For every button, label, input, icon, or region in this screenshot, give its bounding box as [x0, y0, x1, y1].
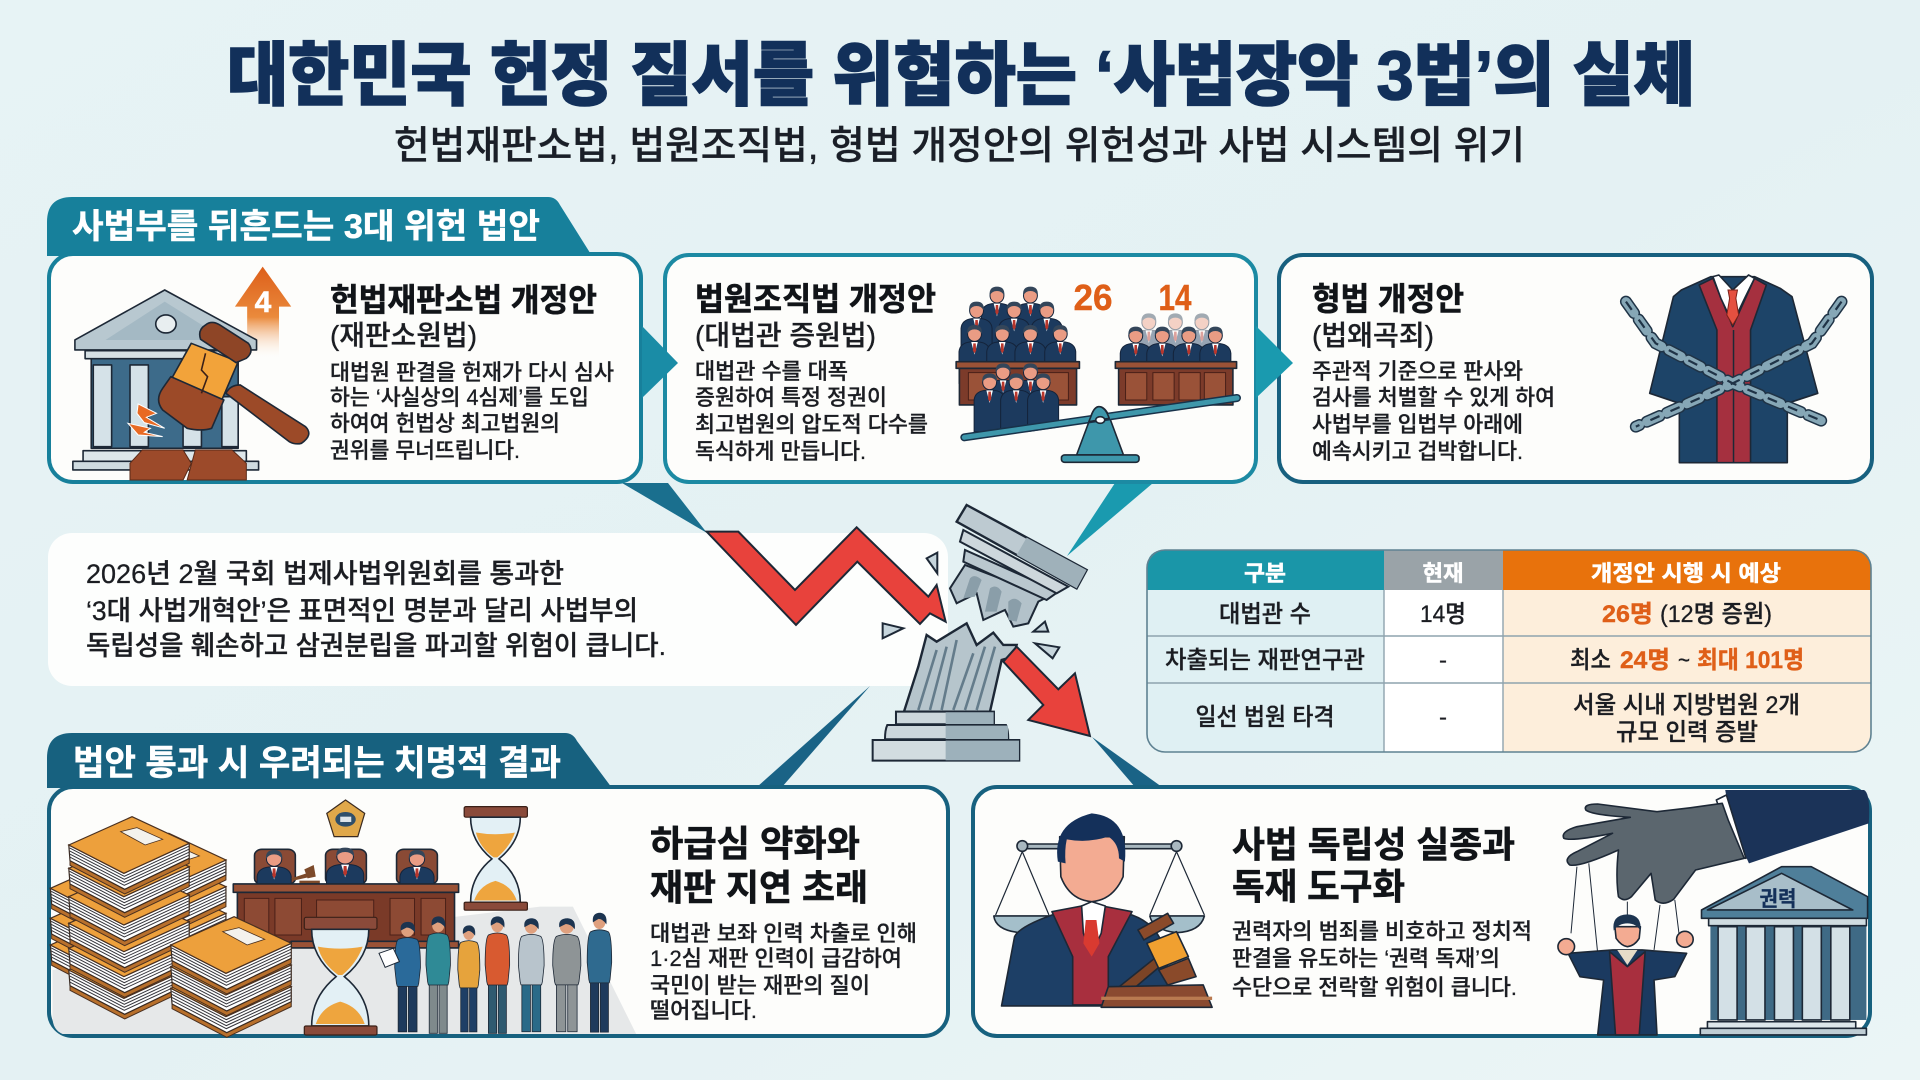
row: justices: (12명 증원): [1660, 601, 1772, 628]
heading: [650, 823, 868, 908]
description: [330, 360, 614, 463]
illustration: faceless judge with scales: [994, 813, 1212, 1007]
description: 사법부를 입법부 아래에: [1312, 412, 1523, 437]
arrow number: 4: [255, 286, 272, 319]
description: 권위를 무너뜨립니다.: [330, 438, 520, 463]
row: research judges: ~: [1678, 647, 1690, 674]
intro text box: 독립성을 훼손하고 삼권분립을 파괴할 위험이 큽니다.: [86, 631, 666, 661]
description: [1312, 359, 1555, 464]
connector spike: column to bottom left panel: [757, 686, 870, 787]
table header: [1244, 561, 1781, 586]
heading: 재판 지연 초래: [650, 867, 868, 908]
description: 최고법원의 압도적 다수를: [695, 412, 928, 437]
description: [1232, 919, 1532, 1000]
heading: 헌법재판소법 개정안: [330, 282, 597, 318]
description: 독식하게 만듭니다.: [695, 439, 866, 464]
row: research judges: [1165, 647, 1804, 674]
description: 1·2심 재판 인력이 급감하여: [650, 946, 902, 971]
subheading: (재판소원법): [330, 320, 477, 351]
description: 권력자의 범죄를 비호하고 정치적: [1232, 919, 1532, 944]
description: 국민이 받는 재판의 질이: [650, 973, 870, 998]
icon: cracked court and gavel: [73, 267, 309, 480]
heading: 하급심 약화와: [650, 823, 860, 864]
description: [650, 921, 917, 1023]
row: research judges: 최대 101명: [1697, 647, 1804, 674]
illustration: breaking column and falling arrows: [707, 505, 1090, 761]
description: 대법관 수를 대폭: [695, 359, 848, 384]
panel: lower court weakening: [49, 787, 948, 1037]
description: 하는 ‘사실상의 4심제’를 도입: [330, 385, 589, 410]
connector spike: panel 2 to column: [1067, 483, 1153, 556]
row: research judges: -: [1439, 647, 1447, 674]
comparison table: [1147, 550, 1871, 752]
row: justices: 26명: [1602, 601, 1653, 628]
row: lower courts: [1196, 692, 1800, 746]
description: 수단으로 전락할 위험이 큽니다.: [1232, 975, 1517, 1000]
row: lower courts: -: [1439, 704, 1447, 731]
section tab: three bills: 사법부를 뒤흔드는 3대 위헌 법안: [72, 208, 540, 246]
heading: 법원조직법 개정안: [695, 281, 936, 317]
description: 주관적 기준으로 판사와: [1312, 359, 1523, 384]
description: 증원하여 특정 정권이: [695, 385, 887, 410]
description: 떨어집니다.: [650, 998, 757, 1023]
intro text box: [48, 533, 948, 686]
illustration: case files, bench and waiting people: [50, 800, 636, 1037]
title: 대한민국 헌정 질서를 위협하는 ‘사법장악 3법’의 실체: [227, 37, 1695, 114]
panel: criminal act: [1279, 255, 1872, 482]
row: research judges: 24명: [1620, 647, 1670, 674]
illustration: justices on tilted scale: [956, 287, 1237, 462]
heading: 사법 독립성 실종과: [1232, 824, 1515, 865]
row: lower courts: 규모 인력 증발: [1616, 719, 1758, 746]
intro text box: 2026년 2월 국회 법제사법위원회를 통과한: [86, 559, 564, 589]
row: research judges: 차출되는 재판연구관: [1165, 647, 1365, 674]
subheading: (법왜곡죄): [1312, 320, 1434, 351]
table header: 현재: [1422, 561, 1464, 586]
table header: 개정안 시행 시 예상: [1591, 561, 1781, 586]
section tab: consequences: 법안 통과 시 우려되는 치명적 결과: [73, 744, 561, 783]
illustration: puppet judge and power: [1558, 790, 1869, 1035]
description: 하여여 헌법상 최고법원의: [330, 411, 560, 436]
intro text box: ‘3대 사법개혁안’은 표면적인 명분과 달리 사법부의: [86, 596, 638, 626]
row: justices: [1219, 601, 1772, 628]
description: 대법원 판결을 헌재가 다시 심사: [330, 360, 614, 385]
panel: loss of judicial independence: [973, 787, 1870, 1036]
number 14: 14: [1158, 277, 1192, 318]
row: justices: 대법관 수: [1219, 601, 1311, 628]
heading: 독재 도구화: [1232, 866, 1405, 907]
description: 대법관 보좌 인력 차출로 인해: [650, 921, 917, 946]
connector spike: column to bottom right panel: [1092, 737, 1162, 787]
table header: 구분: [1244, 561, 1286, 586]
heading: 형법 개정안: [1312, 281, 1464, 317]
subtitle: 헌법재판소법, 법원조직법, 형법 개정안의 위헌성과 사법 시스템의 위기: [394, 125, 1525, 168]
panel: court organization act: [665, 255, 1256, 482]
row: research judges: 최소: [1570, 647, 1611, 674]
connector spike: panel 1 to column: [622, 483, 707, 533]
label: power: 권력: [1760, 888, 1796, 911]
subheading: (대법관 증원법): [695, 320, 876, 351]
section tab: consequences: [47, 733, 612, 788]
number 26: 26: [1074, 277, 1112, 318]
arrow: panel 1 to panel 2: [642, 326, 678, 398]
panel: constitutional court act: [49, 254, 641, 482]
illustration: chained robe: [1626, 275, 1841, 463]
description: 판결을 유도하는 ‘권력 독재’의: [1232, 946, 1500, 971]
description: 예속시키고 겁박합니다.: [1312, 439, 1523, 464]
row: lower courts: 서울 시내 지방법원 2개: [1573, 692, 1800, 719]
description: [695, 359, 928, 464]
description: 검사를 처벌할 수 있게 하여: [1312, 385, 1555, 410]
row: justices: 14명: [1420, 601, 1466, 628]
arrow: panel 2 to panel 3: [1256, 326, 1293, 398]
section tab: three bills: [47, 197, 592, 256]
row: lower courts: 일선 법원 타격: [1196, 704, 1334, 731]
heading: [1232, 824, 1515, 907]
